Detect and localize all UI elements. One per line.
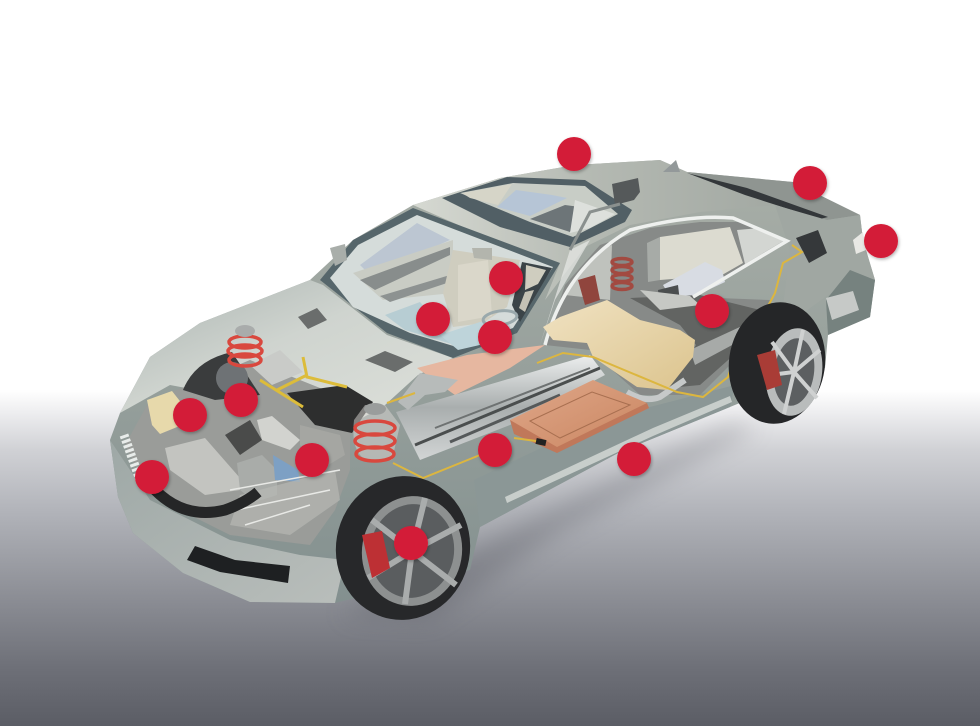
rear spring	[612, 258, 632, 290]
antenna	[663, 160, 680, 172]
frame	[230, 470, 340, 535]
wheel	[482, 309, 518, 327]
front springs	[228, 325, 400, 462]
rear exhaust	[826, 291, 859, 320]
fuel flap	[796, 230, 827, 263]
black hose	[155, 490, 258, 512]
seat	[443, 250, 520, 327]
copper power unit	[417, 345, 545, 395]
gray box	[237, 455, 277, 502]
chassis dark	[630, 295, 760, 388]
hood vents	[298, 308, 327, 329]
footwell blue	[385, 302, 455, 345]
tail light	[853, 232, 866, 254]
front wheel	[325, 465, 481, 631]
black box	[287, 385, 373, 433]
chrome window trim	[545, 217, 787, 345]
windshield	[320, 208, 560, 358]
silver module	[250, 350, 303, 385]
ground shadow	[340, 425, 760, 620]
cutaway interior behind door	[545, 222, 785, 395]
rear wheel	[721, 296, 833, 430]
marker dots	[135, 137, 898, 560]
mirror top	[612, 178, 640, 205]
car body	[110, 160, 875, 603]
fuel tank	[543, 300, 695, 390]
headrest	[472, 248, 492, 260]
mirror left	[330, 244, 347, 266]
rear quarter upper	[775, 205, 875, 330]
silver pipes	[396, 355, 685, 460]
airbag	[663, 262, 725, 300]
supercharger	[257, 416, 300, 450]
grille	[124, 435, 140, 480]
wheel arch	[183, 352, 260, 400]
battery top	[510, 380, 649, 453]
front door pillar translucent	[540, 240, 590, 345]
roof	[413, 160, 775, 300]
front lower bumper	[110, 440, 345, 603]
rear seat through window	[660, 227, 743, 280]
sunroof	[442, 177, 632, 247]
yellow high voltage cable	[387, 245, 802, 478]
rear door view	[360, 223, 450, 275]
yellow rails	[260, 357, 347, 407]
reservoir	[147, 391, 183, 434]
blue battery	[273, 455, 300, 482]
radiator	[165, 438, 240, 495]
rear seat dark	[512, 262, 552, 322]
lower door panel	[474, 385, 735, 527]
hood	[120, 280, 453, 425]
trunk lid	[687, 172, 860, 220]
engine bay	[124, 350, 373, 545]
